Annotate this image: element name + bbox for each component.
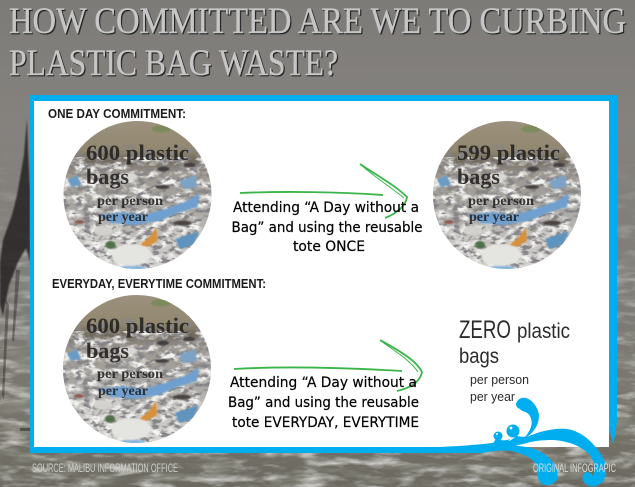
text: everyday action: tote EVERYDAY, EVERYTIME (232, 415, 419, 431)
text: everyday action: Attending “A Day without a (230, 375, 417, 391)
text: one day action (232, 200, 422, 255)
circle: 599 plastic bags: per person (468, 194, 534, 209)
circle: 600 plastic bags, one day: bags (86, 164, 129, 189)
circle: 600 plastic bags, one day (62, 120, 212, 270)
icon: blue wave ornament (440, 398, 606, 486)
text: zero plastic bags: bags (459, 345, 499, 368)
circle: 600 plastic bags, everyday (62, 294, 212, 444)
circle: 599 plastic bags: per year (469, 210, 519, 225)
text: zero plastic bags: plastic (517, 320, 570, 343)
circle: 599 plastic bags: 599 plastic (457, 140, 560, 165)
circle: 600 plastic bags, one day: 600 plastic (86, 140, 189, 165)
text: zero plastic bags: per person (470, 373, 529, 387)
text: one day action: tote ONCE (293, 239, 365, 255)
text: one day action: Attending “A Day without a (233, 200, 419, 216)
arrow: one day (240, 164, 407, 218)
circle: 599 plastic bags (432, 120, 582, 270)
title (9, 1, 626, 84)
heading: everyday commitment: EVERYDAY, EVERYTIME COMMITMENT: (52, 276, 266, 291)
circle: 600 plastic bags, everyday: per year (98, 384, 148, 399)
circle: 599 plastic bags: bags (457, 164, 500, 189)
circle: 600 plastic bags, everyday: 600 plastic (86, 313, 189, 338)
arrow: everyday (234, 340, 422, 391)
circle: 600 plastic bags, one day: per year (98, 210, 148, 225)
text: everyday action: Bag” and using the reusable (228, 395, 419, 411)
text: zero plastic bags: ZERO (459, 316, 511, 344)
panel: commitments (30, 95, 617, 453)
heading: one day commitment: ONE DAY COMMITMENT: (48, 106, 186, 121)
text: zero plastic bags (459, 316, 570, 404)
source note: SOURCE: MALIBU INFORMATION OFFICE (32, 463, 178, 475)
circle: 600 plastic bags, everyday: per person (97, 367, 163, 382)
text: zero plastic bags: per year (470, 390, 515, 404)
title: PLASTIC BAG WASTE? (9, 43, 338, 84)
text: one day action: Bag” and using the reusable (232, 220, 422, 236)
circle: 600 plastic bags, one day: per person (97, 194, 163, 209)
circle: 600 plastic bags, everyday: bags (86, 338, 129, 363)
icon: reeds (0, 118, 31, 431)
text: everyday action (228, 375, 419, 431)
